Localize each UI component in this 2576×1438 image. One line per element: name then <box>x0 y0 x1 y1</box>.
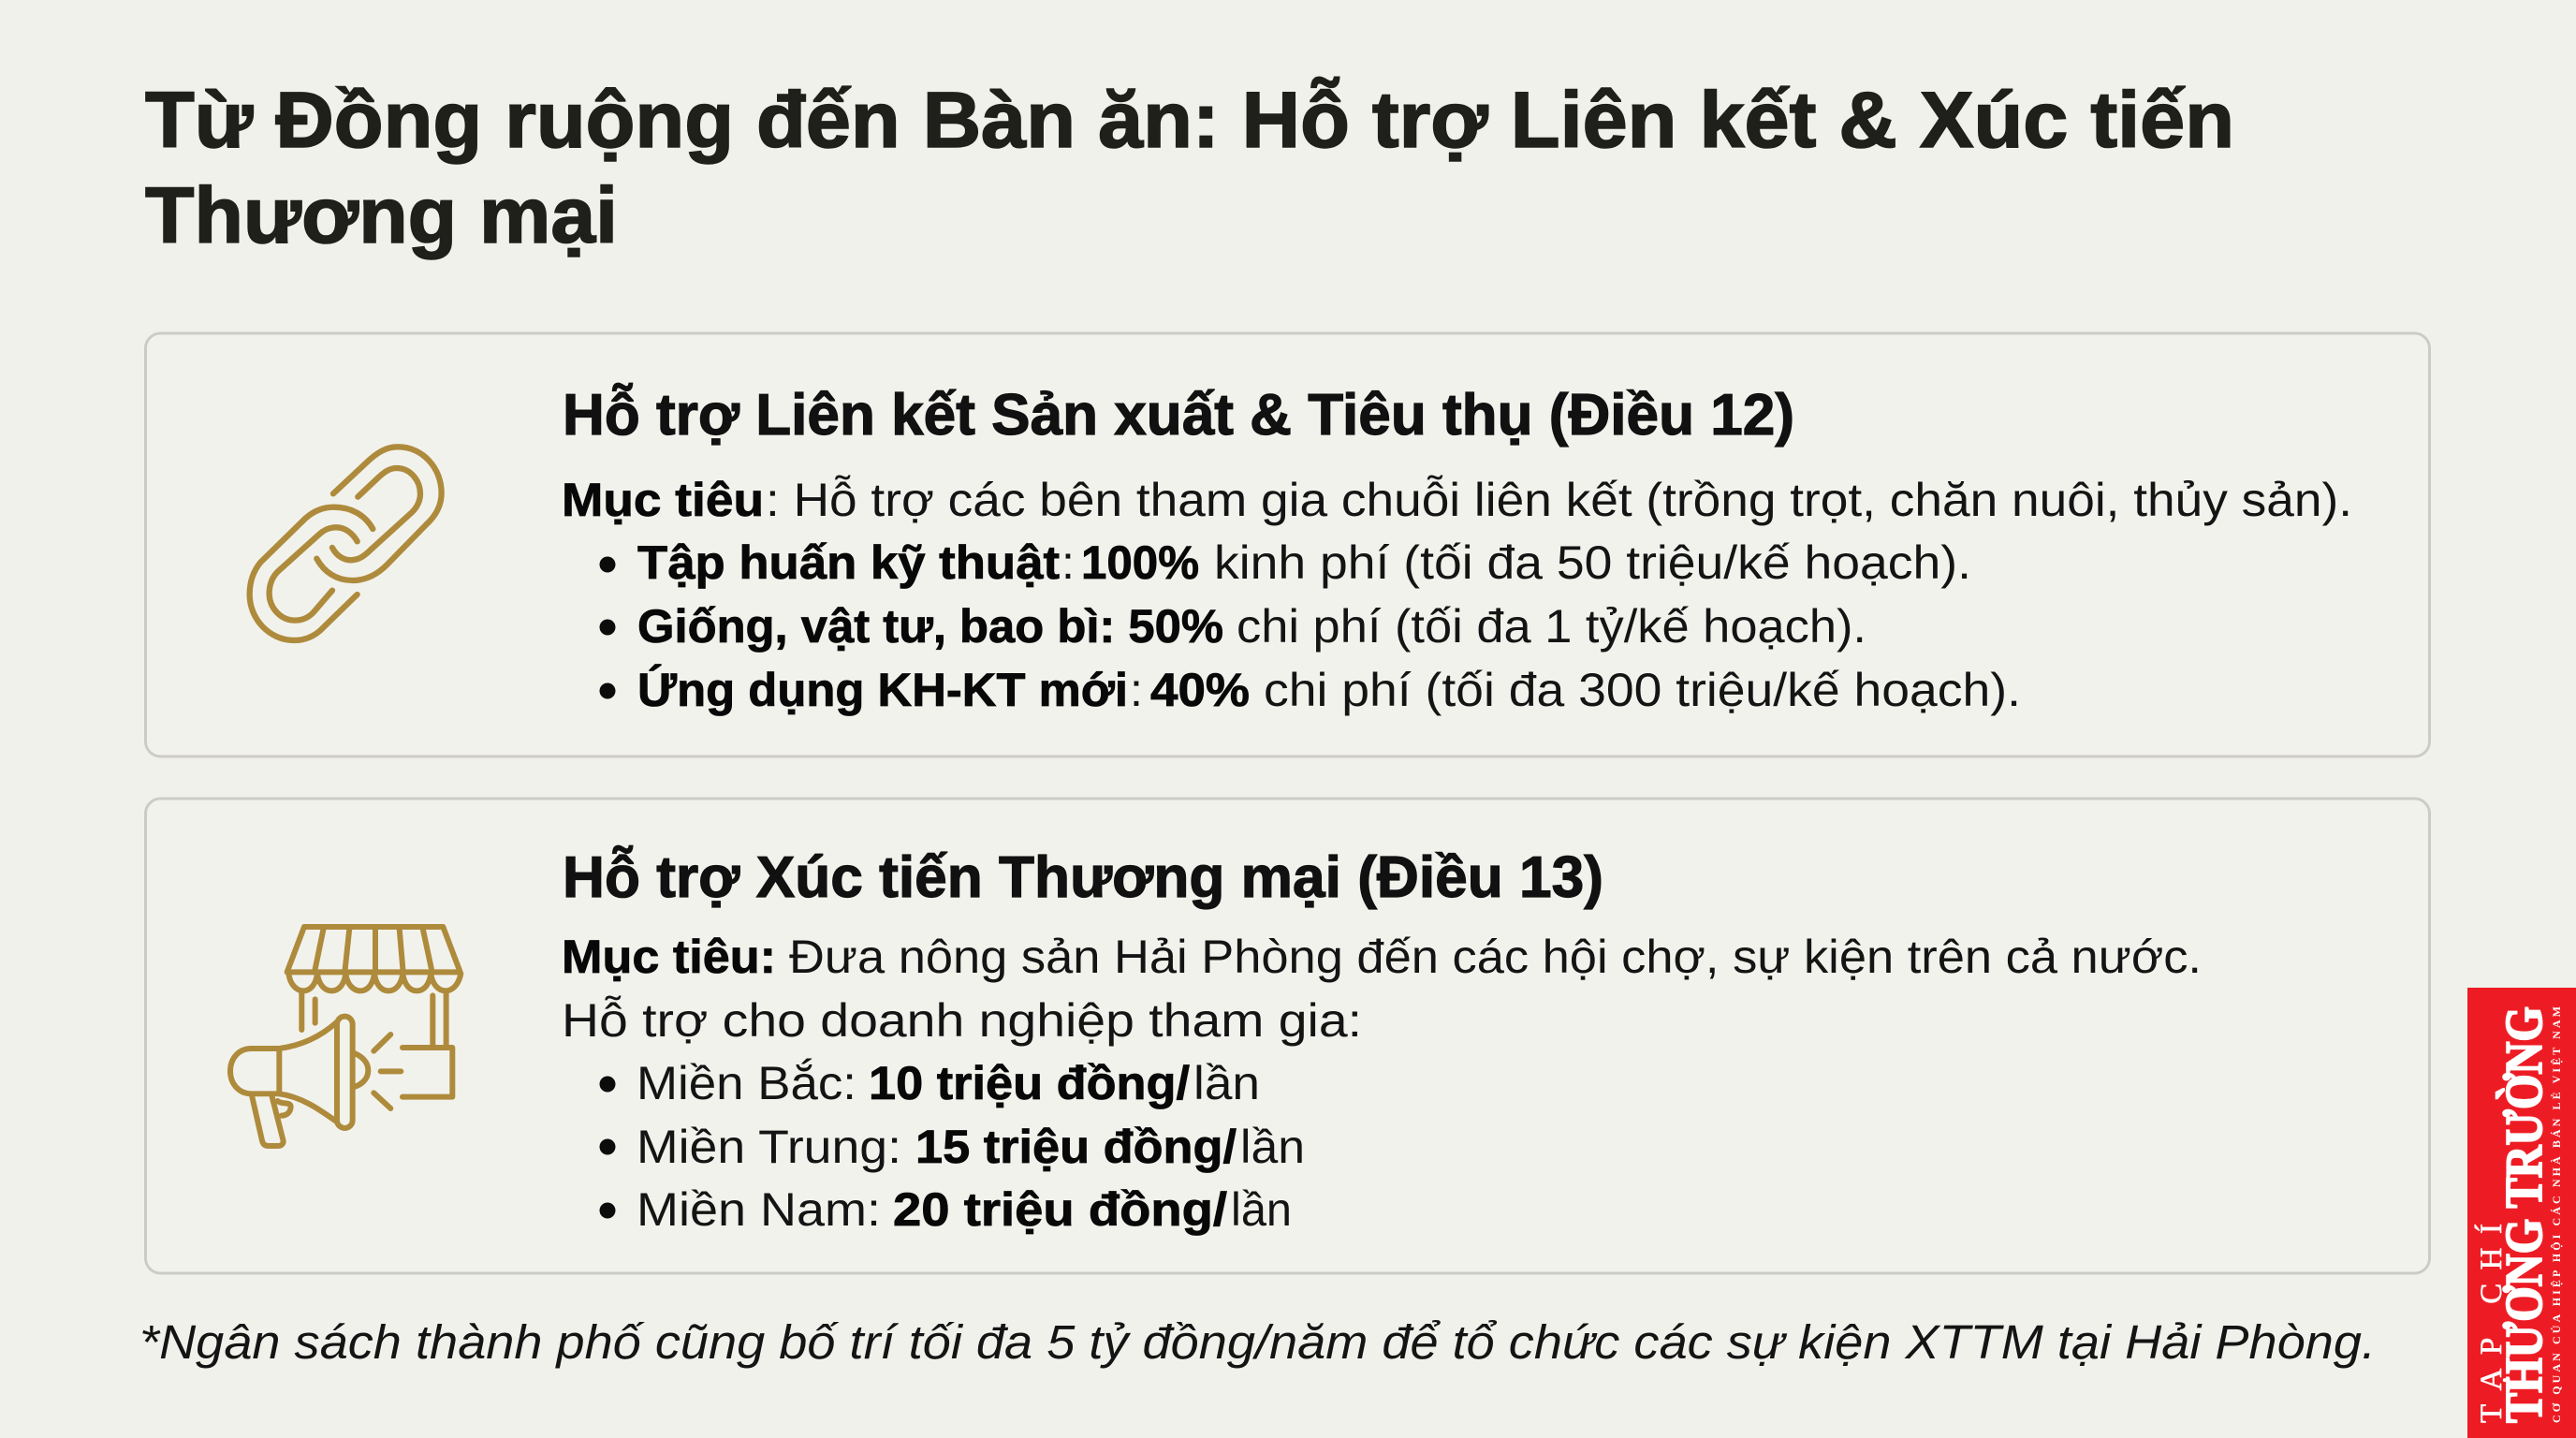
bullet: technical training: kinh phí (tối đa 50 triệu/kế hoạch). <box>1214 536 1971 589</box>
bullet: seed and supplies: chi phí (tối đa 1 tỷ/kế hoạch). <box>1237 600 1866 653</box>
bullet: new technology: : <box>1130 664 1143 716</box>
heading: Article 13: Hỗ trợ Xúc tiến Thương mại (Điều 13) <box>563 845 1603 910</box>
bullet: Central: lần <box>1240 1121 1305 1173</box>
bullet: technical training: 100% <box>1081 536 1199 589</box>
bullet: new technology: chi phí (tối đa 300 triệu/kế hoạch). <box>1264 664 2021 716</box>
panel: production and consumption linkage support <box>146 333 2430 756</box>
objective text: Đưa nông sản Hải Phòng đến các hội chợ, sự kiện trên cả nước. <box>789 931 2202 983</box>
bullet: seed and supplies <box>599 600 1866 653</box>
bullet: seed and supplies: Giống, vật tư, bao bì: 50% <box>637 600 1223 653</box>
bullet: South <box>599 1183 1292 1236</box>
objective text: : Hỗ trợ các bên tham gia chuỗi liên kết (trồng trọt, chăn nuôi, thủy sản). <box>766 474 2352 526</box>
title <box>145 76 2234 259</box>
logo: Tạp chí Thương Trường: THƯƠNG TRƯỜNG <box>2496 1006 2554 1423</box>
bullet: technical training: : <box>1061 536 1075 589</box>
heading: Article 12: Hỗ trợ Liên kết Sản xuất & Tiêu thụ (Điều 12) <box>563 383 1794 448</box>
icon: market stall and megaphone <box>230 927 461 1146</box>
icon: chain link <box>250 447 442 640</box>
bullet: Central: Miền Trung: <box>637 1121 901 1173</box>
objective text: Mục tiêu <box>562 474 764 526</box>
bullet: technical training: Tập huấn kỹ thuật <box>637 536 1060 589</box>
logo: Tạp chí Thương Trường: TẠP CHÍ <box>2474 1224 2509 1423</box>
bullet: new technology: 40% <box>1150 664 1250 716</box>
logo: Tạp chí Thương Trường <box>2467 988 2576 1438</box>
bullet: South: Miền Nam: <box>637 1183 881 1236</box>
panel: trade promotion support <box>146 799 2430 1273</box>
support intro text: Hỗ trợ cho doanh nghiệp tham gia: <box>562 994 1362 1047</box>
bullet: North: lần <box>1193 1057 1260 1109</box>
bullet: technical training <box>599 536 1971 589</box>
bullet: North: 10 triệu đồng/ <box>869 1057 1190 1109</box>
logo: Tạp chí Thương Trường: CƠ QUAN CỦA HIỆP HỘI CÁC NHÀ BÁN LẺ VIỆT NAM <box>2550 1006 2563 1423</box>
bullet: North <box>599 1057 1260 1109</box>
bullet: Central: 15 triệu đồng/ <box>915 1121 1237 1173</box>
bullet: South: 20 triệu đồng/ <box>893 1183 1227 1236</box>
footnote: *Ngân sách thành phố cũng bố trí tối đa 5 tỷ đồng/năm để tổ chức các sự kiện XTTM tại Hải Phòng. <box>139 1315 2376 1369</box>
objective text: Mục tiêu: <box>562 931 776 983</box>
bullet: new technology: Ứng dụng KH-KT mới <box>637 664 1128 716</box>
bullet: new technology <box>599 664 2021 716</box>
title: Thương mại <box>145 171 618 259</box>
bullet: North: Miền Bắc: <box>637 1057 856 1109</box>
bullet: Central <box>599 1121 1305 1173</box>
bullet: South: lần <box>1231 1183 1292 1236</box>
title: Từ Đồng ruộng đến Bàn ăn: Hỗ trợ Liên kết & Xúc tiến <box>145 76 2234 164</box>
